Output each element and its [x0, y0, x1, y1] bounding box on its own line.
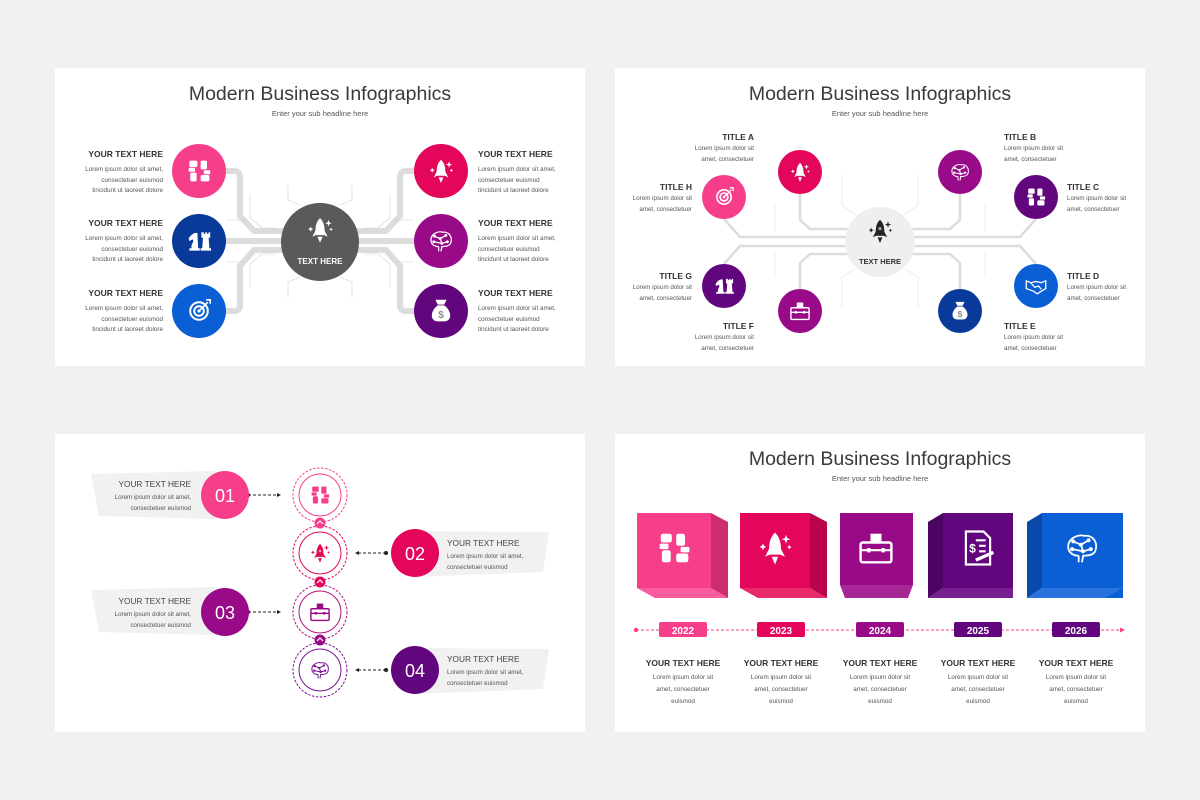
- right items: tincidunt ut laoreet dolore: [478, 326, 549, 333]
- right items: [414, 144, 556, 338]
- left items: Lorem ipsum dolor sit amet,: [85, 235, 163, 242]
- year pills: 2025: [967, 626, 990, 637]
- panel: slide 3 vertical steps: [55, 434, 585, 732]
- titles right: TITLE D: [1067, 271, 1099, 281]
- titles right: Lorem ipsum dolor sit: [1004, 145, 1063, 152]
- left items: [85, 144, 226, 338]
- title: Modern Business Infographics: [749, 83, 1011, 105]
- year texts: Lorem ipsum dolor sit: [1046, 674, 1106, 681]
- right items: YOUR TEXT HERE: [478, 288, 553, 298]
- center circle: [281, 203, 359, 281]
- left items: YOUR TEXT HERE: [88, 288, 163, 298]
- subtitle: Enter your sub headline here: [272, 109, 368, 118]
- titles left: Lorem ipsum dolor sit: [633, 284, 692, 291]
- left items: YOUR TEXT HERE: [88, 149, 163, 159]
- titles right: amet, consectetuer: [1004, 156, 1057, 163]
- year texts: YOUR TEXT HERE: [744, 658, 819, 668]
- year texts: YOUR TEXT HERE: [646, 658, 721, 668]
- left items: Lorem ipsum dolor sit amet,: [85, 305, 163, 312]
- number circles: 04: [405, 661, 425, 681]
- panel: slide 4 timeline: [615, 434, 1145, 732]
- year texts: euismod: [868, 698, 892, 705]
- title: Modern Business Infographics: [749, 448, 1011, 470]
- titles left: TITLE A: [722, 132, 754, 142]
- right items: consectetuer euismod: [478, 246, 540, 253]
- titles right: TITLE B: [1004, 132, 1036, 142]
- titles left: TITLE H: [660, 182, 692, 192]
- year texts: Lorem ipsum dolor sit: [948, 674, 1008, 681]
- titles left: Lorem ipsum dolor sit: [695, 334, 754, 341]
- number circles: 03: [215, 603, 235, 623]
- left items: Lorem ipsum dolor sit amet,: [85, 166, 163, 173]
- number circles: [201, 471, 439, 694]
- right items: Lorem ipsum dolor sit amet,: [478, 166, 556, 173]
- titles left: TITLE F: [723, 321, 754, 331]
- step texts: [115, 479, 524, 687]
- year pills: 2024: [869, 626, 892, 637]
- titles right: Lorem ipsum dolor sit: [1067, 284, 1126, 291]
- titles left: amet, consectetuer: [701, 156, 754, 163]
- grey label panels: [91, 471, 549, 694]
- circles: [702, 150, 1058, 333]
- dashed arrows: [248, 495, 386, 670]
- year texts: amet, consectetuer: [754, 686, 808, 693]
- titles right: Lorem ipsum dolor sit: [1004, 334, 1063, 341]
- step texts: YOUR TEXT HERE: [118, 596, 191, 606]
- number circles: 02: [405, 544, 425, 564]
- year texts: Lorem ipsum dolor sit: [850, 674, 910, 681]
- step texts: YOUR TEXT HERE: [447, 654, 520, 664]
- step texts: consectetuer euismod: [130, 505, 192, 512]
- year texts: amet, consectetuer: [951, 686, 1005, 693]
- year texts: YOUR TEXT HERE: [843, 658, 918, 668]
- connectors: [224, 171, 416, 311]
- number circles: 01: [215, 486, 235, 506]
- timeline: [634, 628, 1125, 632]
- titles right: amet, consectetuer: [1067, 295, 1120, 302]
- titles left: Lorem ipsum dolor sit: [633, 195, 692, 202]
- titles right: TITLE E: [1004, 321, 1036, 331]
- step texts: consectetuer euismod: [447, 564, 508, 571]
- left items: YOUR TEXT HERE: [88, 218, 163, 228]
- year texts: euismod: [671, 698, 695, 705]
- subtitle: Enter your sub headline here: [832, 109, 928, 118]
- ring icons: [311, 487, 330, 678]
- year texts: Lorem ipsum dolor sit: [751, 674, 811, 681]
- year texts: Lorem ipsum dolor sit: [653, 674, 713, 681]
- titles left: Lorem ipsum dolor sit: [695, 145, 754, 152]
- year texts: YOUR TEXT HERE: [1039, 658, 1114, 668]
- left items: consectetuer euismod: [101, 316, 163, 323]
- right items: tincidunt ut laoreet dolore: [478, 256, 549, 263]
- left items: tincidunt ut laoreet dolore: [92, 256, 163, 263]
- titles right: TITLE C: [1067, 182, 1099, 192]
- titles left: amet, consectetuer: [639, 295, 692, 302]
- year pills: 2026: [1065, 626, 1088, 637]
- step rings: [293, 468, 347, 697]
- year texts: euismod: [1064, 698, 1088, 705]
- left items: tincidunt ut laoreet dolore: [92, 187, 163, 194]
- right items: Lorem ipsum dolor sit amet,: [478, 235, 556, 242]
- right items: tincidunt ut laoreet dolore: [478, 187, 549, 194]
- titles right: amet, consectetuer: [1067, 206, 1120, 213]
- year texts: amet, consectetuer: [1049, 686, 1103, 693]
- year texts: amet, consectetuer: [853, 686, 907, 693]
- step texts: consectetuer euismod: [130, 622, 192, 629]
- year texts: [646, 658, 1114, 705]
- titles right: amet, consectetuer: [1004, 345, 1057, 352]
- right items: consectetuer euismod: [478, 177, 540, 184]
- center circle: TEXT HERE: [859, 257, 901, 266]
- right items: YOUR TEXT HERE: [478, 149, 553, 159]
- step texts: Lorem ipsum dolor sit amet,: [115, 494, 191, 501]
- year texts: euismod: [769, 698, 793, 705]
- step texts: YOUR TEXT HERE: [118, 479, 191, 489]
- panel: slide 1 hub: [55, 68, 585, 366]
- left items: consectetuer euismod: [101, 177, 163, 184]
- right items: Lorem ipsum dolor sit amet,: [478, 305, 556, 312]
- connectors: [724, 194, 1036, 289]
- caret connectors: [314, 518, 326, 646]
- year pills: 2023: [770, 626, 793, 637]
- right items: YOUR TEXT HERE: [478, 218, 553, 228]
- step texts: Lorem ipsum dolor sit amet,: [447, 669, 524, 676]
- step texts: Lorem ipsum dolor sit amet,: [447, 553, 524, 560]
- titles left: [633, 132, 754, 352]
- step texts: consectetuer euismod: [447, 680, 508, 687]
- year pills: [659, 622, 1100, 637]
- right items: consectetuer euismod: [478, 316, 540, 323]
- left items: tincidunt ut laoreet dolore: [92, 326, 163, 333]
- year pills: 2022: [672, 626, 695, 637]
- cubes: [637, 513, 1123, 598]
- left items: consectetuer euismod: [101, 246, 163, 253]
- center circle: [845, 207, 915, 277]
- subtitle: Enter your sub headline here: [832, 474, 928, 483]
- titles left: TITLE G: [659, 271, 692, 281]
- year texts: YOUR TEXT HERE: [941, 658, 1016, 668]
- titles right: [1004, 132, 1126, 352]
- step texts: YOUR TEXT HERE: [447, 538, 520, 548]
- titles left: amet, consectetuer: [639, 206, 692, 213]
- titles left: amet, consectetuer: [701, 345, 754, 352]
- panel: slide 2 eight titles: [615, 68, 1145, 366]
- titles right: Lorem ipsum dolor sit: [1067, 195, 1126, 202]
- year texts: amet, consectetuer: [656, 686, 710, 693]
- center circle: TEXT HERE: [298, 257, 343, 266]
- step texts: Lorem ipsum dolor sit amet,: [115, 611, 191, 618]
- year texts: euismod: [966, 698, 990, 705]
- title: Modern Business Infographics: [189, 83, 451, 105]
